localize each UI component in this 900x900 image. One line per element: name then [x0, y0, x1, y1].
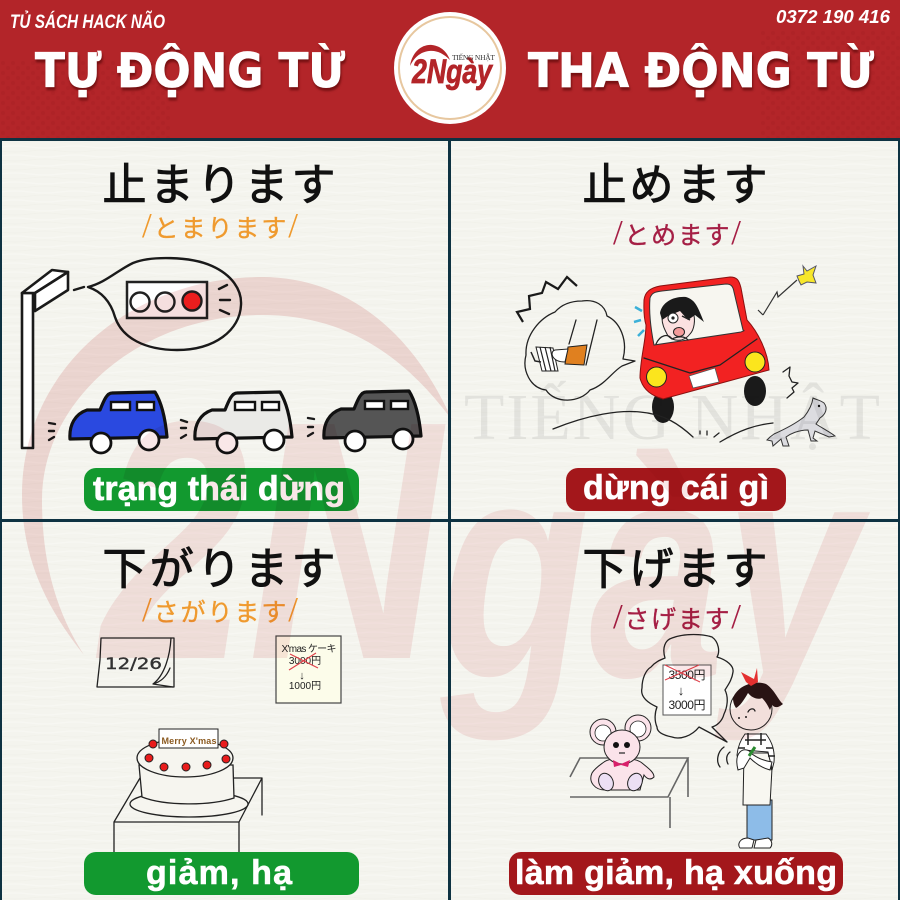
illustration: traffic sign pole: [22, 270, 68, 448]
illustration: dark car: [308, 391, 421, 451]
logo badge: [394, 12, 506, 124]
illustration: calendar: 12/26: [105, 654, 162, 673]
kanji heading: 止まります: [102, 161, 336, 210]
heading: tha động từ: THA ĐỘNG TỪ: [528, 44, 875, 99]
kanji heading: 止めます: [582, 161, 768, 210]
illustration: cat: [767, 367, 835, 446]
panel: sagemasu: [509, 545, 843, 895]
label pill: [84, 852, 359, 895]
illustration: price note: 3000円: [289, 656, 321, 667]
illustration: price note: X'mas ケーキ: [282, 643, 336, 655]
label: phone number: 0372 190 416: [776, 7, 891, 27]
illustration: cake on table: [114, 729, 262, 852]
watermark lettering: 2N: [100, 351, 535, 731]
illustration: price note: [276, 636, 341, 703]
reading: /とまります/: [142, 206, 298, 245]
watermark: 2Ngày logo: [22, 277, 880, 744]
illustration: price note: 1000円: [289, 681, 321, 692]
logo badge: TIẾNG NHẬT: [452, 52, 495, 62]
label pill: giảm, hạ: [146, 854, 293, 892]
illustration: white car: [181, 392, 292, 453]
reading: /さがります/: [142, 590, 298, 629]
reading: /とめます/: [613, 213, 741, 252]
panel: tomarimasu: [22, 161, 421, 511]
label pill: làm giảm, hạ xuống: [515, 854, 837, 892]
illustration: pedal thought bubble: [517, 277, 635, 400]
illustration: teddy bear on table: [570, 715, 688, 828]
illustration: cake on table: Merry X'mas: [162, 736, 216, 746]
illustration: calendar: [97, 638, 174, 687]
illustration: price thought bubble: [642, 634, 733, 742]
watermark: tiếng nhật: TIẾNG NHẬT: [464, 380, 880, 454]
panel: tomemasu: [517, 161, 835, 511]
illustration: price thought bubble: 3500円: [668, 668, 706, 682]
kanji heading: 下がります: [102, 545, 336, 594]
illustration: star and jagged line: [758, 266, 816, 315]
illustration: road bumps: [553, 412, 773, 442]
illustration: speech bubble with signal: [74, 258, 241, 350]
watermark swoosh: [22, 277, 452, 655]
illustration: price note: ↓: [299, 670, 305, 682]
illustration: price thought bubble: ↓: [678, 683, 684, 698]
illustration: price thought bubble: 3000円: [668, 698, 706, 712]
logo badge: 2Ngày: [411, 53, 494, 91]
illustration: red car with driver: [634, 277, 769, 423]
illustration: girl with apron: [718, 668, 783, 848]
header dot texture right: [760, 30, 900, 138]
panel: sagarimasu: [84, 545, 359, 895]
reading: /さげます/: [613, 597, 741, 636]
label pill: dừng cái gì: [583, 469, 769, 507]
header dot texture left: [0, 60, 170, 138]
label: tủ sách hack não: TỦ SÁCH HACK NÃO: [10, 11, 165, 33]
label pill: trạng thái dừng: [93, 470, 345, 508]
illustration: blue car: [49, 392, 167, 453]
header band: [0, 0, 900, 138]
heading: tự động từ: TỰ ĐỘNG TỪ: [35, 44, 346, 99]
kanji heading: 下げます: [582, 545, 768, 594]
